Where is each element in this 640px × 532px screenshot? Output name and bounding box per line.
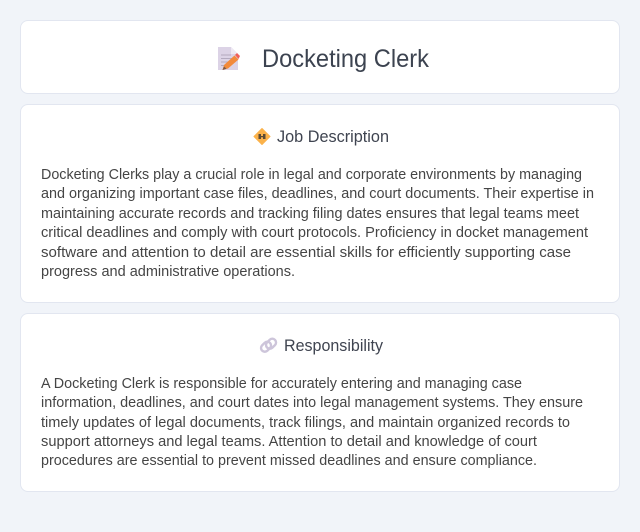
icon: diamond sign [254, 128, 270, 144]
text block: job description: software and attention to detail are essential skills for efficiently supporting case [41, 245, 571, 261]
text block: job description [41, 167, 594, 280]
text block: responsibility: procedures are essential to prevent missed deadlines and ensure compliance. [41, 453, 537, 469]
heading: responsibility: Responsibility [284, 337, 384, 355]
text block: responsibility: support attorneys and legal teams. Attention to detail and knowledge of court [41, 434, 537, 450]
text block: job description: Docketing Clerks play a crucial role in legal and corporate environments by managing [41, 167, 582, 183]
panel: job description card [20, 104, 620, 303]
panel: responsibility card [20, 313, 620, 492]
text block: job description: progress and administrative operations. [41, 264, 295, 280]
text block: responsibility: timely updates of legal documents, track filings, and maintain organized records to [41, 415, 570, 431]
title: Docketing Clerk [262, 45, 429, 73]
text block: responsibility [41, 376, 583, 469]
heading: job description: Job Description [277, 128, 389, 146]
text block: job description: maintaining accurate records and tracking filing dates ensures that legal teams meet [41, 206, 579, 222]
icon: chain link [259, 337, 278, 353]
text block: responsibility: A Docketing Clerk is responsible for accurately entering and managing case [41, 376, 522, 392]
icon: document with pencil [218, 47, 240, 70]
panel: title card [20, 20, 620, 94]
text block: job description: critical deadlines and comply with court protocols. Proficiency in docket management [41, 225, 588, 241]
text block: responsibility: information, deadlines, and court dates into legal management systems. They ensure [41, 395, 583, 411]
text block: job description: and organizing important case files, deadlines, and court documents. Their expertise in [41, 186, 594, 202]
